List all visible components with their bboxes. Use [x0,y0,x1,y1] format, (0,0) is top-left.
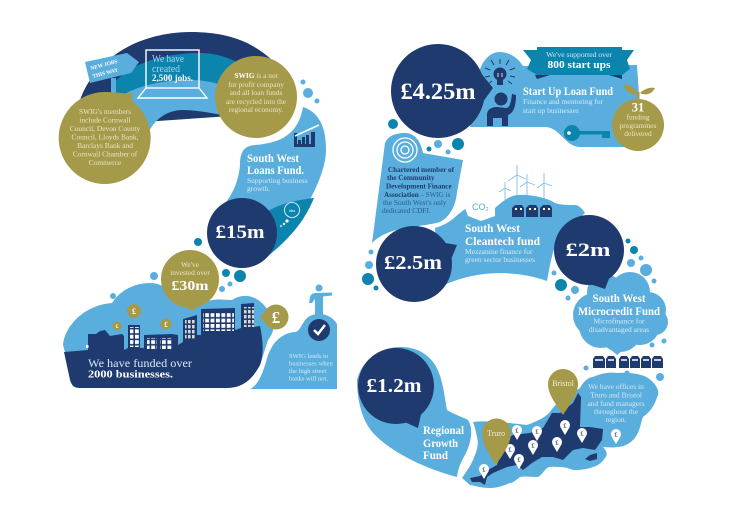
panel: South West Microcredit Fund: South West [592,293,646,305]
panel: Start Up Loan Fund: start up businesses [523,106,579,115]
icon: check mark [308,319,330,341]
text: funded businesses [88,356,192,380]
callout: SWIG not for profit: regional economy. [229,105,283,114]
icons: white location pins: £ [515,428,519,434]
stat: £2.5m [376,226,457,302]
stat: £2.5m: £2.5m [384,252,442,274]
icons: pound coins: £ [116,324,119,330]
panel: Regional Growth Fund [357,347,471,477]
icon: idea thought bubble: idea [289,208,296,213]
decorative bubbles under £4.25m [388,119,464,154]
callout: SWIG not for profit: are recycled into the [226,97,287,106]
panel: Regional Growth Fund: Fund [423,450,449,462]
icon: new jobs signpost [85,53,139,96]
icon: leaves [623,85,655,100]
callout: SWIG not for profit: SWIG is a not [234,71,279,80]
stat: 31 funding programmes: delivered [624,129,652,138]
panel: South West Loans Fund: growth. [247,184,270,193]
icon: new jobs signpost: NEW JOBS [90,59,118,72]
text: offices: region. [605,415,627,424]
stat: £15m [207,198,277,268]
stat: £4.25m [391,44,493,138]
stat: £15m: £15m [216,222,265,243]
stat: 31 funding programmes: programmes [620,121,657,130]
icons: row of houses [593,356,663,368]
text: offices: throughout the [594,407,639,416]
icons: white location pins: £ [614,432,618,438]
panel: South West Loans Fund: Supporting business [247,176,308,185]
icon: key [564,125,610,141]
text: offices: We have offices in [588,382,644,391]
panel: CDFA charter [372,133,463,243]
callout: SWIG not for profit [215,56,297,138]
icons: white location pins: £ [482,466,486,474]
panel: South West Loans Fund: Loans Fund. [247,165,304,177]
callout: SWIG's members [59,92,151,184]
decorative bubbles near loans fund [300,80,320,104]
icon: light bulb [485,59,515,85]
panel: South West Cleantech fund: Cleantech fund [465,236,541,248]
icon: idea thought bubble [280,202,300,227]
panel: CDFA charter: dedicated CDFI. [382,206,431,215]
stat: invested £30m: £30m [172,279,209,294]
icon: laptop [138,50,207,98]
stat: £1.2m: £1.2m [366,375,422,397]
icons: white location pins: £ [563,422,567,430]
icons: white location pins: £ [580,430,584,438]
callout: SWIG's members: Cornwall Chamber of [73,150,138,158]
text: jobs created [152,54,193,83]
panel: CDFA charter: Development Finance [386,182,452,190]
panel: South West Cleantech fund: Mezzanine finance for [465,247,533,256]
callout: SWIG not for profit: and all loan funds [230,88,282,97]
icons: white location pins [479,420,621,479]
stat: invested £30m [161,250,219,311]
text: funded businesses: We have funded over [88,356,192,370]
panel: Start Up Loan Fund: Start Up Loan Fund [523,86,614,98]
icon: person raising hand [487,92,516,126]
stat: £2m: £2m [566,240,611,261]
text: jobs created: We have [152,54,185,65]
icons: pound coins [112,304,172,330]
panel: Regional Growth Fund: Growth [423,438,459,450]
text: SWIG lends: banks will not. [289,376,328,382]
icon: pound speech bubble [260,304,288,330]
text: funded businesses: 2000 businesses. [88,368,173,380]
stat: £2m [554,215,624,289]
decorative bubbles around houses [584,338,666,381]
pin: Bristol: Bristol [552,379,575,388]
text: SWIG lends: the high street [289,368,327,375]
text: offices [587,382,645,424]
text: SWIG lends [289,353,333,382]
callout: SWIG's members: Commerce [89,158,122,167]
text: jobs created: created [152,64,180,75]
panel: Start Up Loan Fund: Finance and mentoring for [523,97,604,106]
icons: white location pins: £ [508,446,512,454]
panel: offices and map background [462,373,658,488]
panel: CDFA charter: Chartered member of [388,166,455,174]
stat: invested £30m: invested over [170,268,210,277]
panel: city cloud [63,283,274,370]
panel: CDFA charter: the Community [387,174,435,182]
callout: SWIG's members: SWIG's members [79,107,131,116]
icon: CO2 arrow [463,202,495,221]
panel: South West Loans Fund [212,107,326,262]
text: jobs created: 2,500 jobs. [152,73,193,83]
pin: Bristol [548,369,578,415]
icons: pound coins: £ [164,321,168,329]
callout: SWIG's members: Council, Devon County [70,124,141,133]
panel: South West Cleantech fund: South West [465,223,520,235]
panel: South West Microcredit Fund: Microcredit Fund [578,306,661,318]
callout: SWIG's members: Council, Lloyds Bank, [72,132,139,142]
text: offices: and fund managers [587,399,645,408]
decorative bubbles around £2m [552,238,656,300]
stat: £1.2m [358,348,434,428]
icon: new jobs signpost: THIS WAY [92,67,119,80]
ribbon: 800 start ups: 800 start ups [548,59,611,71]
icons: white location pins: £ [531,442,535,450]
stat: £4.25m: £4.25m [400,79,476,104]
pin: Truro [482,418,511,465]
icon: CO2 arrow: CO [472,202,486,212]
panel: Start Up Loan Fund [470,52,640,147]
number 2: top arc [80,32,272,140]
icon: person on hill [309,284,332,315]
panel: CDFA charter: Association – SWIG is [384,191,451,199]
map: south west England [470,393,603,485]
stat: 31 funding programmes: 31 [632,100,644,114]
text: offices: Truro and Bristol [590,390,642,400]
panel: South West Loans Fund: South West [247,153,299,165]
panel: South West Microcredit Fund: disadvantaged areas [589,325,649,334]
callout: SWIG's members: Barclays Bank and [77,141,133,150]
decorative bubbles left of £2.5m [362,250,378,290]
stat: 31 funding programmes: funding [626,112,650,122]
icon: pound speech bubble: £ [272,308,280,327]
stat: invested £30m: We've [181,260,200,269]
text: SWIG lends: businesses when [289,360,333,368]
callout: SWIG's members: include Cornwall [79,116,131,124]
panel: CDFA charter: the South West's only [383,198,447,207]
pin: Truro: Truro [487,429,505,438]
panel: South West Cleantech fund: green sector businesses [465,255,535,264]
panel: South West Microcredit Fund: Microfinance for [593,316,645,326]
icons: pound coins: £ [132,307,136,316]
panel: South West Cleantech fund [435,195,585,287]
decorative bubbles near £30m [110,238,246,299]
icons: houses [512,205,552,217]
stat: 31 funding programmes [612,99,664,151]
icons: wind turbines [499,165,552,200]
icon: CO2 arrow: 2 [486,207,489,213]
text: SWIG lends: SWIG lends to [289,353,329,360]
callout: SWIG not for profit: for profit company [228,80,284,89]
icon: bar chart with arrow [294,125,319,147]
ribbon: 800 start ups: We've supported over [546,50,612,59]
city skyline and navy base [64,303,263,388]
panel: lending hill [250,314,337,389]
icons: white location pins: £ [517,456,521,464]
icons: white location pins: £ [555,440,559,446]
panel: South West Microcredit Fund [573,272,668,355]
panel: Regional Growth Fund: Regional [423,425,464,437]
ribbon: 800 start ups [523,47,634,79]
icons: white location pins: £ [535,428,539,436]
